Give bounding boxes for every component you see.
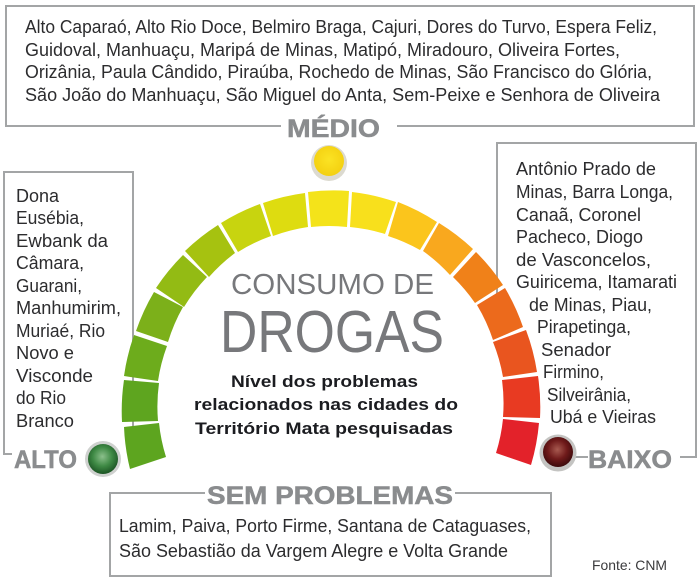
text: cidades nível alto: Branco (16, 411, 74, 431)
subtitle (194, 373, 458, 438)
heading: sem problemas: SEM PROBLEMAS (207, 482, 453, 510)
text: cidades nível médio: Guidoval, Manhuaçu, Maripá de Minas, Matipó, Miradouro, Oliveira Fortes, (25, 40, 620, 60)
subtitle: Território Mata pesquisadas (195, 420, 453, 438)
source: Fonte: CNM (592, 557, 667, 573)
text: cidades sem problemas: Lamim, Paiva, Porto Firme, Santana de Cataguases, (119, 516, 531, 536)
text: cidades nível baixo: de Minas, Piau, (529, 295, 652, 315)
text: cidades nível alto: Manhumirim, (16, 298, 121, 318)
text: cidades nível alto: Ewbank da (16, 231, 109, 251)
text: cidades nível alto: Muriaé, Rio (16, 321, 105, 341)
text: cidades nível alto: Visconde (16, 366, 93, 386)
text: cidades nível alto: Novo e (16, 343, 74, 363)
text: cidades nível médio: Orizânia, Paula Cândido, Piraúba, Rochedo de Minas, São Francisco do Glória, (25, 62, 652, 82)
panel: baixo (497, 143, 696, 457)
text: cidades sem problemas (119, 516, 531, 561)
text: cidades nível alto: Guarani, (16, 276, 82, 296)
panel: médio (6, 6, 694, 126)
icon: green light (85, 441, 121, 477)
heading: médio: MÉDIO (287, 114, 380, 143)
title: drogas: DROGAS (220, 299, 444, 365)
icon: yellow light (311, 145, 347, 181)
title: consumo de: CONSUMO DE (231, 269, 434, 301)
subtitle: relacionados nas cidades do (194, 396, 458, 414)
text: cidades nível baixo: Pacheco, Diogo (516, 227, 643, 247)
text: cidades nível baixo: Senador (541, 340, 611, 360)
text: cidades sem problemas: São Sebastião da Vargem Alegre e Volta Grande (119, 541, 508, 561)
text: cidades nível baixo: Canaã, Coronel (516, 205, 641, 225)
text: cidades nível baixo: Pirapetinga, (537, 317, 631, 337)
heading: baixo: BAIXO (588, 446, 672, 474)
panel: sem problemas (110, 493, 551, 576)
text: cidades nível baixo: Guiricema, Itamarati (516, 272, 677, 292)
text: cidades nível alto: do Rio (16, 388, 66, 408)
heading: alto: ALTO (14, 446, 77, 474)
text: cidades nível médio: São João do Manhuaçu, São Miguel do Anta, Sem-Peixe e Senhora de Oliveira (25, 85, 661, 105)
text: cidades nível baixo: Ubá e Vieiras (550, 407, 656, 427)
text: cidades nível médio: Alto Caparaó, Alto Rio Doce, Belmiro Braga, Cajuri, Dores do Turvo, Espera Feliz, (25, 17, 657, 37)
icon: red light (540, 434, 576, 472)
text: cidades nível alto: Eusébia, (16, 208, 84, 228)
panel: alto (4, 172, 133, 454)
text: cidades nível médio (25, 17, 661, 105)
text: cidades nível baixo: Antônio Prado de (516, 159, 656, 179)
subtitle: Nível dos problemas (231, 373, 418, 391)
text: cidades nível alto: Câmara, (16, 253, 84, 273)
text: cidades nível alto: Dona (16, 186, 60, 206)
text: cidades nível baixo: Minas, Barra Longa, (516, 182, 673, 202)
text: cidades nível baixo: de Vasconcelos, (516, 250, 651, 270)
text: cidades nível baixo: Silveirânia, (547, 385, 631, 405)
text: cidades nível baixo: Firmino, (543, 362, 604, 382)
text: cidades nível alto (16, 186, 121, 431)
text: cidades nível baixo (516, 159, 677, 427)
chart: semicircular gauge (122, 190, 540, 469)
